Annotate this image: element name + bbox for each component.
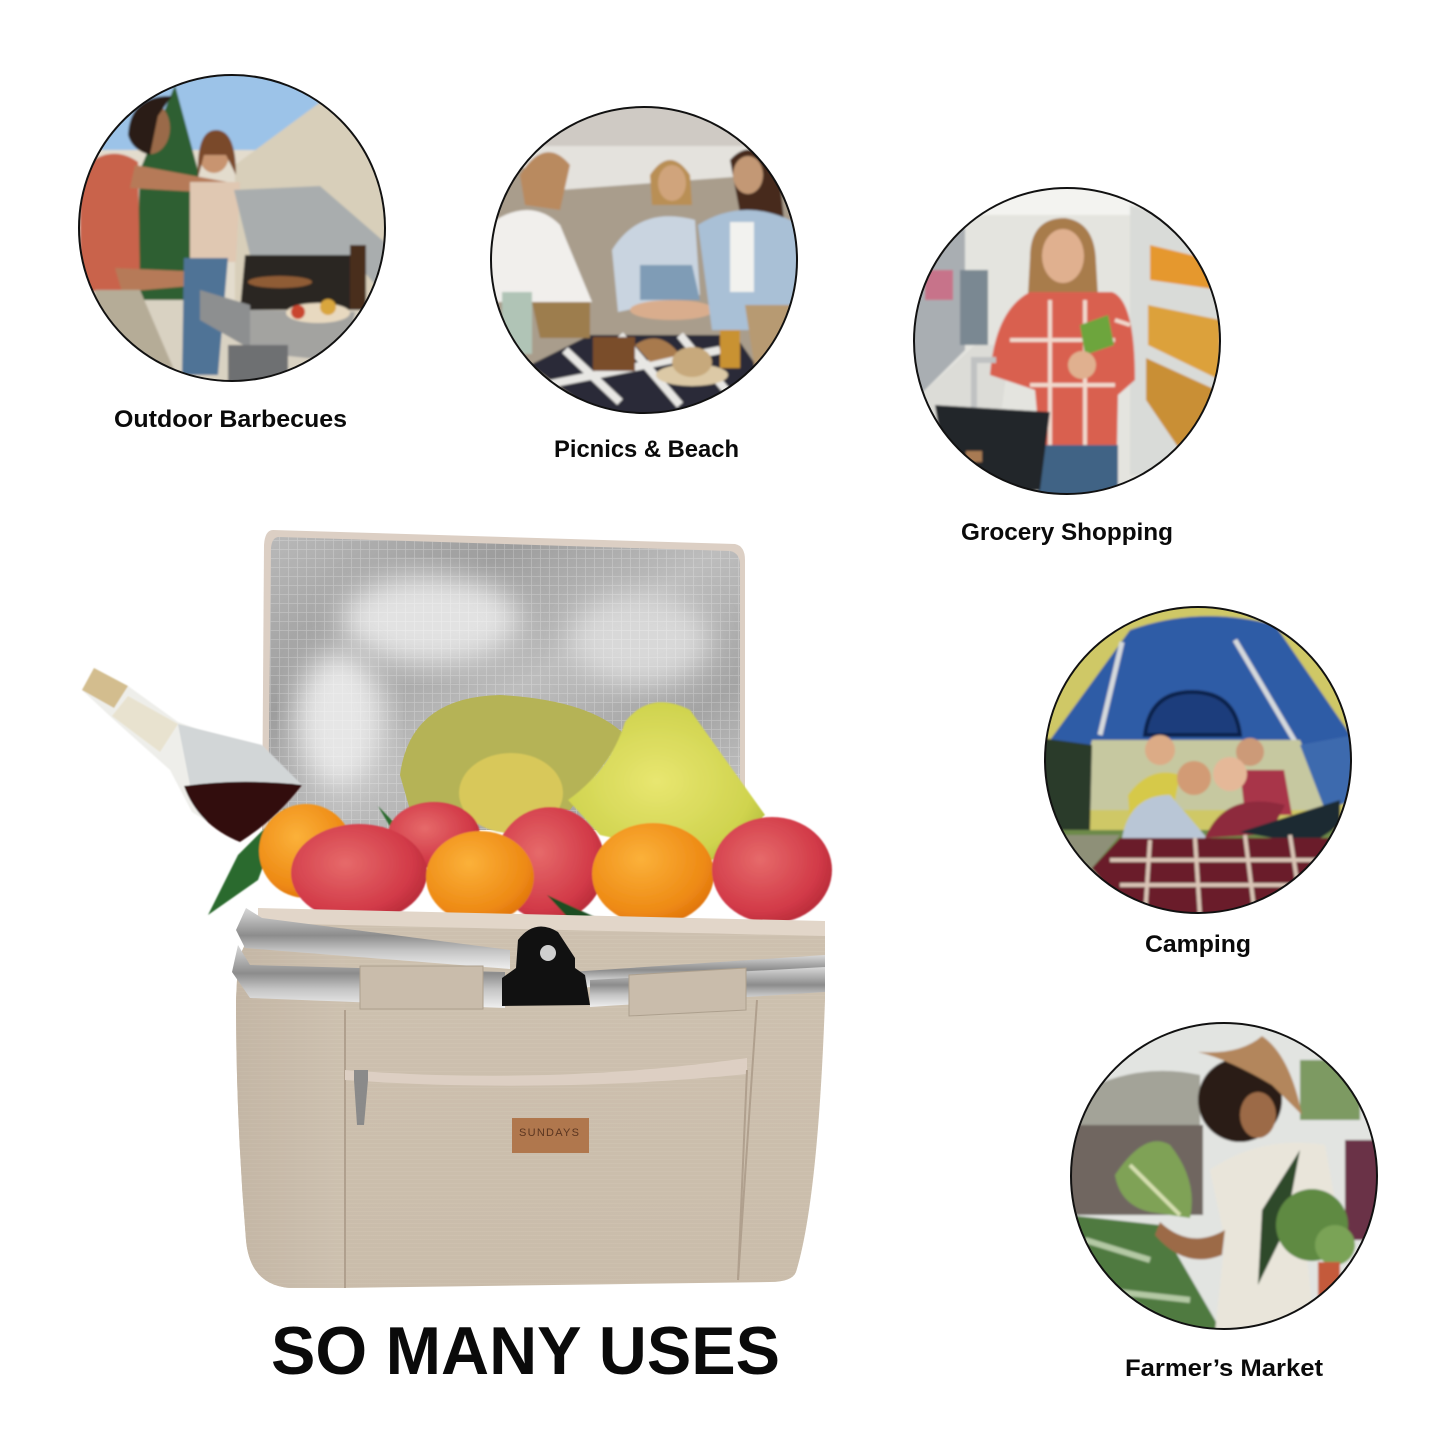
- label: outdoor barbecues: Outdoor Barbecues: [114, 406, 347, 433]
- black handle hinge: [502, 927, 590, 1006]
- photo circle: picnics and beach: [488, 104, 800, 416]
- front zip pocket: [345, 1058, 747, 1280]
- shopping basket: [935, 360, 1050, 495]
- woman with hat: [1154, 1035, 1302, 1328]
- aluminium handle frame: [232, 908, 825, 1016]
- label: farmer's market: Farmer’s Market: [1125, 1355, 1323, 1382]
- photo circle: farmer's market: [1068, 1020, 1380, 1332]
- right woman: [698, 150, 800, 330]
- blue tent: [1042, 616, 1354, 830]
- woman in plaid shirt: [990, 218, 1135, 500]
- open lid with silver foil lining: [262, 530, 745, 830]
- woman with wine: [182, 130, 240, 375]
- gas grill: [200, 186, 388, 385]
- store shelf: [1130, 205, 1225, 475]
- man at the grill: [80, 96, 238, 372]
- plaid blanket: [1066, 832, 1329, 912]
- wine bottle: [82, 668, 302, 842]
- leafy greens held in hands: [1115, 1141, 1355, 1297]
- product: insulated cooler bag with fruit: [82, 530, 832, 1288]
- checked picnic blanket: [530, 335, 770, 416]
- title: SO MANY USES: [271, 1313, 780, 1389]
- bag body: [236, 908, 825, 1288]
- label: grocery shopping: Grocery Shopping: [961, 519, 1173, 546]
- market greens: [1077, 1214, 1218, 1328]
- fruit pile: [208, 702, 832, 925]
- left woman: [488, 152, 592, 302]
- family: [1122, 735, 1340, 845]
- photo circle: grocery shopping: [910, 185, 1225, 500]
- photo circle: camping: [1042, 604, 1354, 916]
- photo circle: outdoor barbecues: [75, 70, 390, 385]
- label: picnics and beach: Picnics & Beach: [554, 436, 739, 463]
- brand patch: SUNDAYS: [519, 1127, 579, 1139]
- label: camping: Camping: [1145, 931, 1251, 958]
- middle woman: [612, 160, 714, 320]
- brand patch: [512, 1118, 589, 1153]
